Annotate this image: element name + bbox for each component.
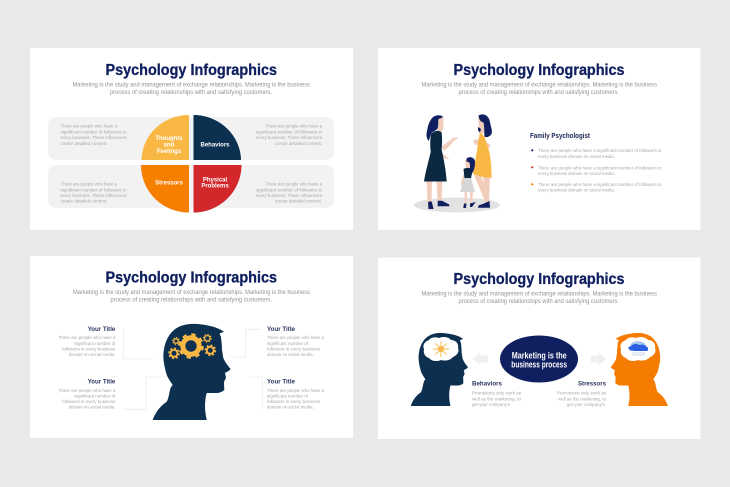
text: your title bottom right: There are people who have a [267,388,324,394]
illustration: family [414,114,500,212]
quadrant: physical problems: Problems [201,184,229,190]
text: your title top left: followers in every business [62,346,116,352]
text: your title top right: significant number of [267,341,309,347]
bullet item 3 [531,182,662,194]
text block: bottom right [256,182,323,205]
text: stressors [557,380,607,408]
text block: top right: create detailed content. [275,141,322,147]
quadrant: behaviors [194,115,241,160]
heading: family psychologist: Family Psychologist [530,133,591,140]
text block: top left: There are people who have a [60,124,117,130]
text block: top right: every business. These influencers [256,135,323,141]
child [460,157,476,208]
text: stressors: Promotions only work as [557,390,607,396]
quadrant: stressors: Stressors [155,181,184,187]
quadrant: stressors [141,165,189,212]
bullet item 1: every business domain on social media. [538,154,615,160]
text: your title bottom right: significant number of [267,394,309,400]
text block: top right: significant number of followers in [256,129,322,135]
title: Psychology Infographics [454,271,625,288]
bullet item 2: every business domain on social media. [538,171,615,177]
panel: two heads [378,258,700,439]
text: your title top right [267,326,324,358]
text: your title bottom left: Your Title [88,378,116,386]
icon: thought cloud with storm [620,337,656,361]
subtitle [73,289,310,304]
quadrant: physical problems [194,165,242,212]
text: your title bottom left: significant number of [74,394,116,400]
text: your title top right: There are people who have a [267,335,324,341]
center ellipse callout [500,336,578,382]
head silhouette [153,324,231,420]
text: behaviors: get your company's. [472,402,511,408]
panel: four-quadrant diagram [30,48,353,230]
text: behaviors: Behaviors [472,380,502,388]
text: behaviors: Promotions only work as [472,390,522,396]
text: your title bottom right: Your Title [267,378,295,386]
subtitle: process of creating relationships with and satisfying customers. [110,296,272,304]
text: stressors: well as the marketing, to [558,396,606,402]
bullet item 3: There are people who have a significant number of followers in [538,182,662,188]
bullet item 2 [531,165,662,177]
quadrant: behaviors: Behaviors [200,142,230,148]
text: your title top right: Your Title [267,326,295,333]
icon: thought cloud with sun [423,337,459,361]
text: your title top right: domain on social media. [267,352,314,358]
text: your title bottom right [267,378,324,410]
quadrant: physical problems: Physical [203,177,228,183]
center ellipse callout: Marketing is the [512,350,567,360]
title: Psychology Infographics [106,270,277,287]
text: your title top left [59,326,116,358]
text: your title top left: There are people who have a [59,335,116,341]
quadrant: thoughts and feelings: Thoughts [155,136,183,142]
text block: bottom left: every business. These influencers [60,193,127,199]
text block: top left: significant number of followers in [60,129,127,135]
text: your title top left: domain on social media. [69,352,115,358]
connector lines [123,328,262,409]
subtitle: Marketing is the study and management of exchange relationships. Marketing is the business [73,289,310,296]
upper grey band [48,117,334,160]
text: your title bottom left: domain on social media. [69,404,115,410]
text: your title bottom right: domain on social media. [267,404,314,410]
subtitle: process of creating relationships with and satisfying customers. [458,89,619,96]
subtitle: process of creating relationships with and satisfying customers. [110,89,272,96]
text: your title bottom right: followers in every business [267,399,321,405]
text: your title bottom left: followers in every business [62,399,116,405]
subtitle [72,82,310,96]
left head silhouette [411,333,468,406]
bullet item 3: every business domain on social media. [538,188,615,194]
panel: head with gears [30,256,353,438]
panel: family psychologist [378,48,700,230]
bullet item 1: There are people who have a significant number of followers in [538,148,662,154]
text block: top left: create detailed content. [60,141,108,147]
quadrant: thoughts and feelings [142,115,189,160]
text block: bottom left [60,182,127,205]
text block: bottom left: There are people who have a [60,182,117,188]
subtitle: process of creating relationships with and satisfying customers. [458,298,619,305]
quadrant: thoughts and feelings: Feelings [157,149,182,155]
text block: top left [60,124,127,147]
gears icon [169,334,215,358]
text block: top right [256,124,323,147]
arrow: left [473,353,488,365]
bullet item 1 [531,148,662,160]
text: your title top right: followers in every business [267,346,321,352]
text block: bottom left: significant number of followers in [60,187,127,193]
lower grey band [48,165,334,208]
right head silhouette [611,333,668,406]
text block: bottom left: create detailed content. [60,199,108,205]
text: behaviors [472,380,522,408]
quadrant: thoughts and feelings: and [164,142,175,148]
subtitle: Marketing is the study and management of exchange relationships. Marketing is the business [422,82,657,88]
text: behaviors: well as the marketing, to [472,396,521,402]
ground shadow [414,198,500,212]
text: stressors: get your company's. [567,402,606,408]
arrow: right [591,353,606,365]
text block: bottom right: There are people who have a [266,182,322,188]
text: your title top left: Your Title [88,326,116,333]
text: your title bottom left [59,378,116,410]
text block: bottom right: every business. These influencers [256,193,323,199]
bullet item 2: There are people who have a significant number of followers in [538,165,662,171]
text: your title bottom left: There are people who have a [59,388,116,394]
text: stressors: Stressors [578,380,606,388]
text: your title top left: significant number of [74,341,116,347]
subtitle: Marketing is the study and management of exchange relationships. Marketing is the business [72,82,310,88]
subtitle [422,82,657,96]
subtitle [422,290,657,305]
title: Psychology Infographics [454,62,625,79]
center ellipse callout: business process [511,360,567,370]
subtitle: Marketing is the study and management of exchange relationships. Marketing is the business [422,290,657,298]
text block: top left: every business. These influencers [60,135,127,141]
woman in yellow dress [473,114,492,208]
text block: bottom right: create detailed content. [275,199,322,205]
woman in dark dress [424,115,458,209]
title: Psychology Infographics [106,62,277,79]
text block: top right: There are people who have a [266,124,322,130]
text block: bottom right: significant number of followers in [256,187,322,193]
